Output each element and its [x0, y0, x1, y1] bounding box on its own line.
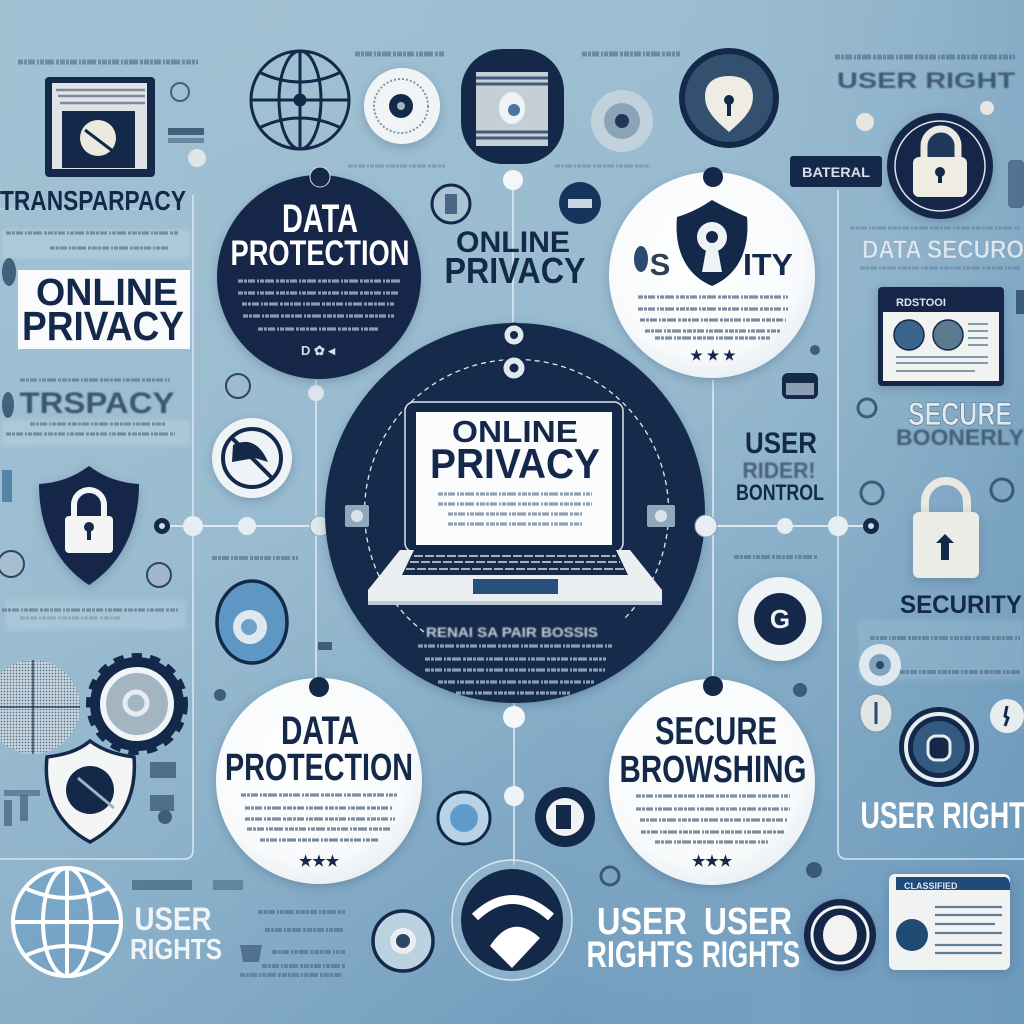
icon: browser window — [878, 287, 1004, 386]
heading: boonerly: BOONERLY — [896, 425, 1024, 450]
heading: user user rights rights: RIGHTS — [586, 934, 694, 975]
heading: transparency: TRANSPARPACY — [0, 185, 186, 216]
heading: security: SECURITY — [900, 591, 1022, 619]
panel: online privacy box — [18, 270, 190, 349]
icon: document — [45, 77, 155, 177]
shield — [677, 200, 747, 286]
body lines — [238, 281, 402, 329]
title: SECURE — [655, 710, 777, 753]
heading: user user rights rights — [586, 901, 800, 975]
mini pin — [634, 246, 648, 272]
word left: S — [650, 247, 670, 282]
connector lines — [162, 180, 870, 865]
heading: user rights left — [130, 901, 222, 966]
icon: gear — [90, 657, 184, 751]
heading: user user rights rights: RIGHTS — [702, 934, 800, 975]
icon: shield ring — [682, 51, 776, 145]
icon: id card — [889, 874, 1010, 970]
word right: ITY — [743, 247, 793, 282]
text block bottom — [240, 912, 345, 975]
top nodes — [502, 324, 526, 380]
icon: halftone globe — [0, 660, 80, 754]
laptop body lines — [438, 494, 592, 524]
body lines — [241, 795, 397, 840]
icon: wallet — [782, 373, 818, 399]
central circle — [325, 323, 705, 703]
icon: lock circle — [887, 113, 993, 219]
side tags — [345, 505, 675, 527]
label: lateral — [790, 156, 882, 187]
body lines — [636, 796, 790, 842]
body lines — [638, 297, 788, 338]
label: lateral: BATERAL — [802, 164, 870, 180]
icon: blue oval — [217, 581, 287, 663]
title 2: PROTECTION — [225, 747, 413, 789]
middle heading: PRIVACY — [444, 250, 586, 291]
icon: padlock right — [913, 481, 979, 578]
title 2: PROTECTION — [230, 234, 410, 273]
icon: cup — [240, 945, 262, 962]
icon: small medallions top — [432, 182, 601, 224]
heading: user right: USER RIGHT — [837, 68, 1016, 93]
icon: white shield — [46, 741, 134, 842]
icon: face circle — [804, 899, 876, 971]
laptop title: ONLINE — [452, 414, 578, 449]
heading: trspacy: TRSPACY — [20, 387, 174, 420]
faint text lines mid — [212, 166, 1020, 672]
icon: eye medal — [364, 68, 440, 144]
title: DATA — [281, 709, 359, 753]
connector nodes — [154, 170, 879, 536]
panel: online privacy box: PRIVACY — [22, 303, 184, 349]
title 2: BROWSHING — [620, 749, 806, 791]
icon: right column medallions — [859, 644, 1024, 787]
heading: user rights left: RIGHTS — [130, 934, 222, 966]
mini stars: ★ ★ ★ — [690, 347, 736, 363]
icon: small circles bottom — [373, 787, 595, 971]
icon: g medal — [738, 577, 822, 661]
right lower connector node — [503, 515, 717, 806]
panel: security white — [609, 167, 815, 378]
panel: secure browsing — [609, 676, 815, 885]
icon: key medal — [591, 90, 653, 152]
heading: user rights left: USER — [134, 901, 212, 937]
heading: user control — [736, 427, 824, 505]
text block top — [18, 54, 1015, 62]
text block left — [2, 233, 178, 618]
stars: ★★★ — [692, 853, 733, 870]
small decorative glyphs — [2, 83, 1024, 890]
icon: globe top — [251, 51, 349, 149]
icon: browser window: RDSTOOI — [896, 297, 946, 309]
icon: small left medallions — [0, 101, 994, 587]
heading: user control: RIDER! — [742, 458, 816, 483]
middle heading — [444, 226, 586, 291]
icon: no sign — [212, 418, 292, 498]
panel: online privacy box: ONLINE — [36, 272, 178, 314]
heading: user user rights rights: USER — [597, 901, 687, 943]
icon: wifi — [452, 860, 572, 980]
laptop title 2: PRIVACY — [430, 440, 600, 487]
lower heading: RENAI SA PAIR BOSSIS — [426, 624, 598, 640]
panel: data protection white — [216, 677, 422, 884]
stars: ★★★ — [299, 853, 340, 870]
icon: dark shield lock — [39, 466, 139, 585]
icon: white globe — [13, 868, 121, 976]
title: DATA — [282, 197, 358, 241]
middle heading: ONLINE — [456, 226, 570, 259]
panel outlines — [0, 190, 1024, 859]
icon: g medal: G — [770, 604, 790, 634]
heading: user control: USER — [745, 427, 817, 460]
small icons: D ✿ ◂ — [301, 343, 335, 358]
panel: data protection dark — [217, 167, 421, 379]
heading: user control: BONTROL — [736, 480, 824, 505]
laptop — [368, 402, 662, 605]
lower text lines — [418, 646, 612, 693]
icon: browser badge — [461, 49, 564, 164]
icon: id card: CLASSIFIED — [904, 881, 958, 891]
heading: user user rights rights: USER — [704, 901, 792, 943]
